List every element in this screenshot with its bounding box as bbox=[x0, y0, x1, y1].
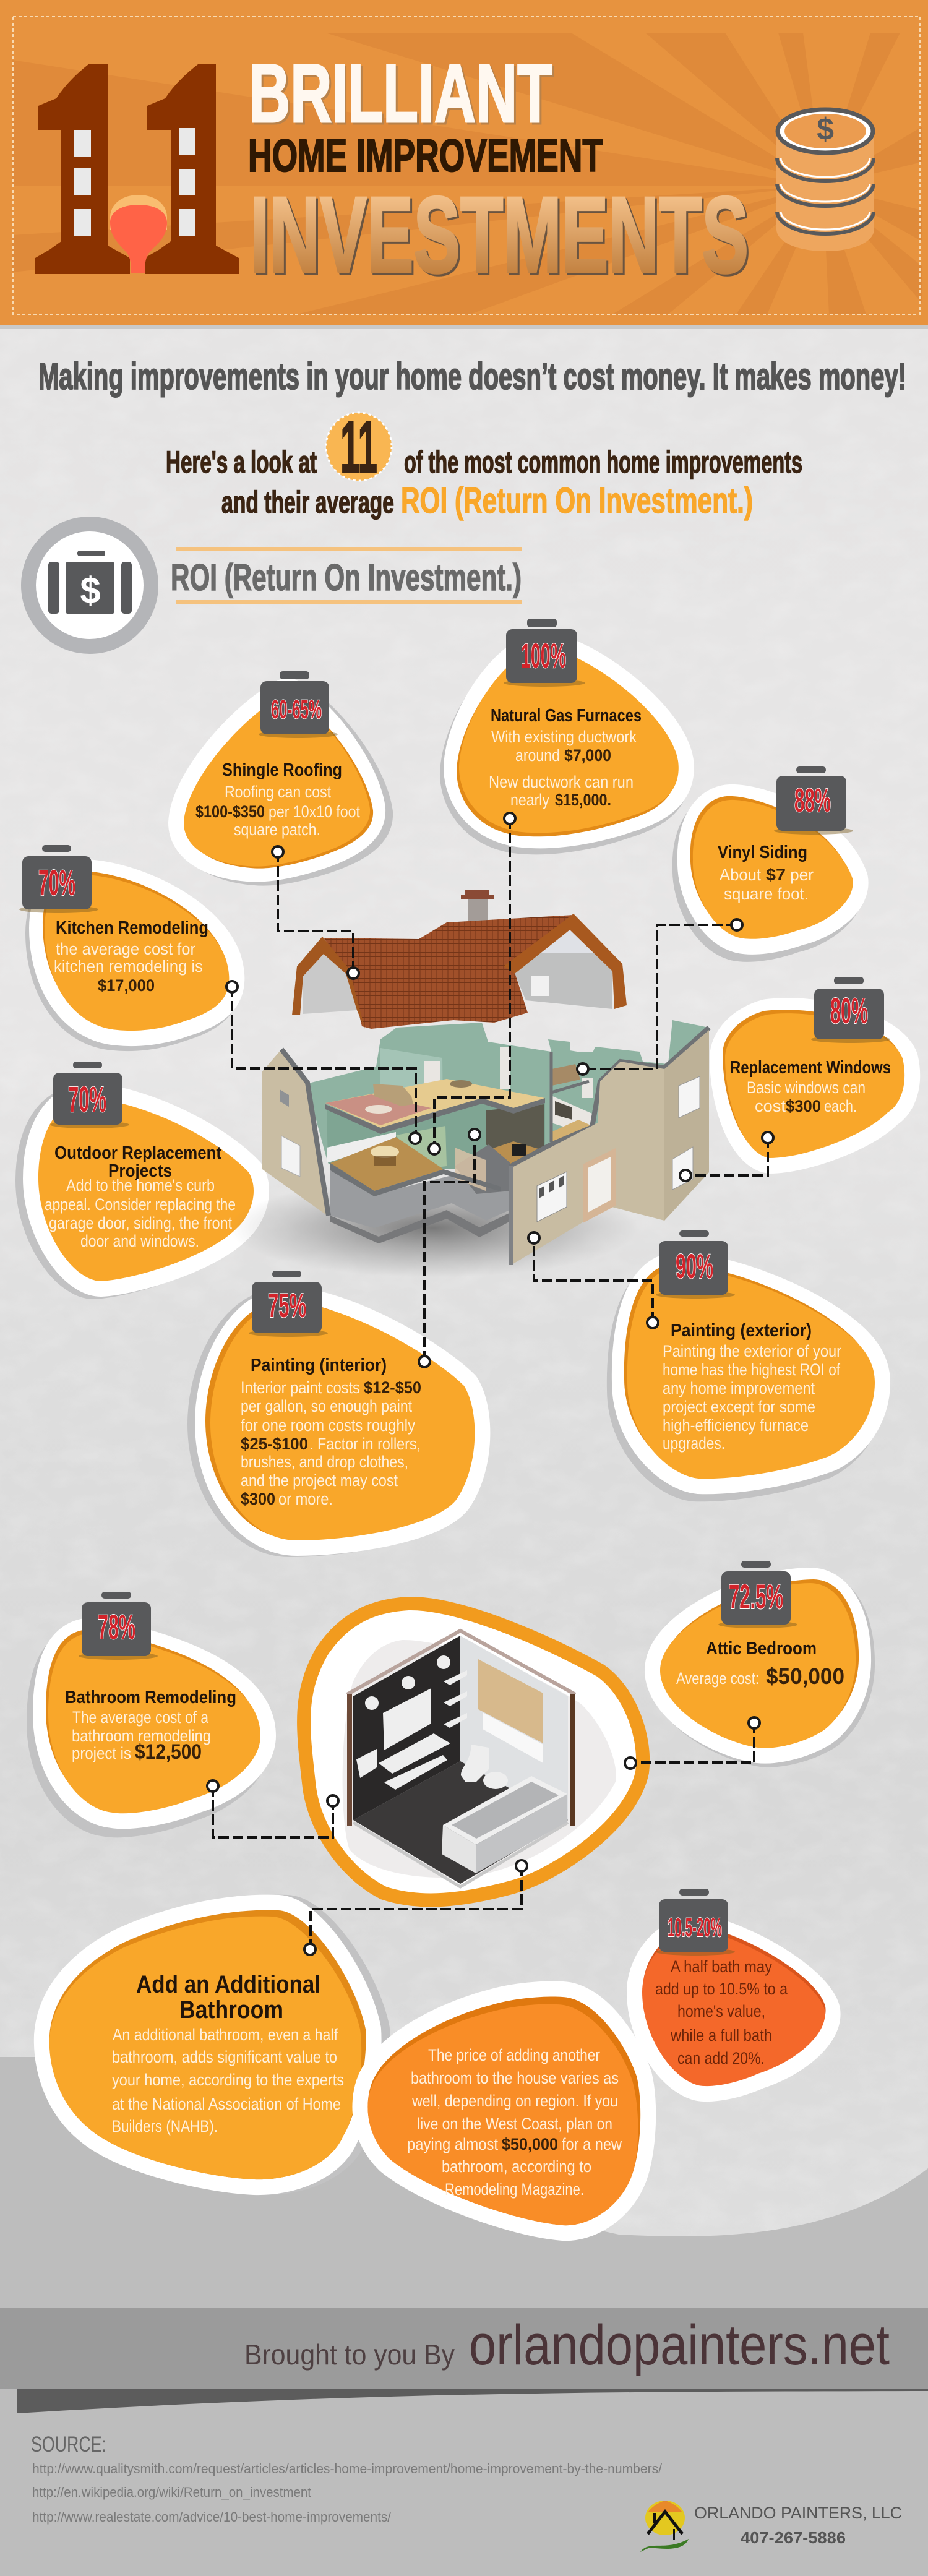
mirror, sink and fixtures bbox=[356, 1655, 508, 1790]
body text: and the project may cost bbox=[241, 1471, 398, 1490]
body text bbox=[407, 2046, 622, 2199]
connector: vinyl siding bbox=[577, 919, 742, 1075]
body text bbox=[676, 1664, 844, 1689]
body text: $12,500 bbox=[135, 1740, 202, 1764]
body text: About bbox=[720, 865, 761, 884]
ROI legend bbox=[28, 524, 522, 646]
bubble: half bath value bbox=[642, 1889, 826, 2086]
heading: Bathroom Remodeling bbox=[65, 1688, 236, 1707]
bubble: vinyl siding bbox=[688, 766, 853, 947]
body text: $17,000 bbox=[98, 976, 155, 995]
heading: Projects bbox=[108, 1161, 172, 1181]
title bbox=[248, 48, 749, 296]
badge: number 11 bbox=[326, 406, 392, 488]
percent tag: 70% bbox=[19, 845, 98, 913]
bubble: painting exterior bbox=[622, 1230, 875, 1486]
body text: your home, according to the experts bbox=[112, 2071, 344, 2089]
body text: Add to the home's curb bbox=[66, 1176, 215, 1195]
body text: project except for some bbox=[663, 1397, 815, 1416]
basement bbox=[330, 1170, 511, 1228]
body text: $12-$50 bbox=[364, 1378, 421, 1397]
connector: painting exterior bbox=[528, 1232, 658, 1328]
body text: paying almost bbox=[407, 2135, 498, 2153]
heading bbox=[54, 1143, 221, 1181]
body text: Painting the exterior of your bbox=[663, 1342, 841, 1360]
body text: door and windows. bbox=[80, 1232, 199, 1250]
intro line two: and their average bbox=[221, 485, 394, 520]
body text bbox=[45, 1176, 236, 1250]
body text bbox=[720, 865, 814, 903]
bubble: cost of adding a bathroom bbox=[367, 1997, 640, 2225]
percent tag: 70%: 70% bbox=[38, 863, 75, 903]
source links bbox=[32, 2461, 663, 2525]
source links: http://www.realestate.com/advice/10-best-home-improvements/ bbox=[32, 2509, 392, 2525]
body text bbox=[489, 728, 637, 809]
heading: Vinyl Siding bbox=[718, 843, 807, 862]
bubble: bathroom remodeling bbox=[42, 1592, 260, 1822]
percent tag: 70%: 70% bbox=[68, 1080, 106, 1120]
body text: home's value, bbox=[677, 2002, 765, 2020]
body text: or more. bbox=[278, 1490, 333, 1508]
bubble: attic bedroom bbox=[660, 1561, 859, 1752]
body text bbox=[72, 1708, 211, 1764]
percent tag: 80%: 80% bbox=[830, 991, 868, 1031]
body text: With existing ductwork bbox=[491, 728, 637, 746]
body text: An additional bathroom, even a half bbox=[113, 2025, 338, 2044]
percent tag: 70% bbox=[50, 1062, 129, 1128]
legend heading: ROI (Return On Investment.) bbox=[171, 557, 522, 598]
window blind bbox=[478, 1659, 543, 1743]
connector: bathroom remodeling bbox=[207, 1780, 338, 1837]
body text: live on the West Coast, plan on bbox=[417, 2114, 612, 2133]
sources bbox=[31, 2432, 663, 2525]
body text: The price of adding another bbox=[428, 2046, 600, 2064]
body text: $300 bbox=[241, 1490, 275, 1508]
grey floor edges bbox=[330, 1163, 501, 1196]
percent tag: 78%: 78% bbox=[98, 1607, 135, 1646]
percent tag: 100% bbox=[504, 619, 585, 687]
percent tag: 78% bbox=[79, 1592, 158, 1660]
body text: A half bath may bbox=[671, 1957, 772, 1976]
body text: for a new bbox=[562, 2135, 622, 2153]
heading: Add an Additional bbox=[136, 1971, 320, 1998]
illustration: bathroom in orange ring bbox=[304, 1604, 643, 1900]
body text: $100-$350 bbox=[195, 802, 265, 821]
source heading: SOURCE: bbox=[31, 2432, 106, 2457]
illustration: cutaway house bbox=[229, 1020, 709, 1277]
body text: appeal. Consider replacing the bbox=[45, 1195, 236, 1214]
body text: $7 bbox=[766, 865, 786, 884]
icon: briefcase with dollar: $ bbox=[80, 570, 101, 611]
heading: Bathroom bbox=[179, 1996, 283, 2024]
heading: Shingle Roofing bbox=[222, 760, 342, 780]
body text: Roofing can cost bbox=[225, 783, 331, 801]
body text: can add 20%. bbox=[677, 2049, 765, 2067]
body text: $50,000 bbox=[502, 2135, 558, 2153]
percent tag: 75% bbox=[249, 1271, 328, 1337]
intro line one start: Here's a look at bbox=[166, 445, 317, 479]
connector: painting interior bbox=[419, 1129, 480, 1367]
brought to you by: Brought to you By bbox=[244, 2338, 455, 2371]
heading: Outdoor Replacement bbox=[54, 1143, 221, 1163]
connector lines: painting bbox=[419, 1129, 658, 1367]
chimney bbox=[461, 890, 494, 921]
body text: Average cost: bbox=[676, 1669, 759, 1688]
legend heading bbox=[171, 547, 522, 604]
body text: cost bbox=[755, 1097, 786, 1115]
body text: around bbox=[515, 746, 560, 765]
body text: bathroom, according to bbox=[442, 2157, 591, 2176]
body text: Interior paint costs bbox=[241, 1378, 360, 1397]
connector: replacement windows bbox=[680, 1132, 773, 1181]
heading: Painting (interior) bbox=[251, 1355, 387, 1375]
body text bbox=[112, 2025, 344, 2136]
body text: well, depending on region. If you bbox=[411, 2092, 618, 2110]
heading: Replacement Windows bbox=[730, 1058, 891, 1078]
body text: New ductwork can run bbox=[489, 773, 634, 791]
right rooms bbox=[551, 1052, 597, 1142]
percent tag: 72.5% bbox=[718, 1561, 797, 1628]
percent tag: 60-65% bbox=[259, 671, 338, 738]
title line: home improvement: HOME IMPROVEMENT bbox=[248, 130, 603, 181]
connector: kitchen remodeling bbox=[226, 981, 421, 1144]
bubble: natural gas furnaces bbox=[455, 619, 679, 839]
body text: any home improvement bbox=[663, 1379, 815, 1397]
icon: coin stack bbox=[776, 109, 874, 251]
connector: gas furnaces bbox=[429, 813, 515, 1154]
heading: Attic Bedroom bbox=[706, 1639, 817, 1659]
body text: nearly bbox=[510, 791, 549, 809]
bathtub bbox=[443, 1776, 567, 1845]
heading: Painting (exterior) bbox=[671, 1321, 812, 1341]
body text: each. bbox=[824, 1097, 857, 1115]
icon: briefcase with dollar bbox=[28, 524, 151, 646]
body text: high-efficiency furnace bbox=[663, 1416, 809, 1435]
heading: Natural Gas Furnaces bbox=[491, 706, 642, 726]
body text: . Factor in rollers, bbox=[309, 1435, 421, 1453]
bubble: shingle roofing bbox=[184, 671, 377, 870]
body text: home has the highest ROI of bbox=[663, 1360, 840, 1379]
body text: garage door, siding, the front bbox=[49, 1214, 232, 1232]
body text: Builders (NAHB). bbox=[112, 2117, 218, 2136]
bubble: painting interior bbox=[203, 1271, 475, 1542]
percent tag: 60-65%: 60-65% bbox=[271, 695, 322, 724]
badge: number 11: 11 bbox=[340, 406, 377, 488]
body text: while a full bath bbox=[670, 2026, 772, 2045]
body text: per 10x10 foot bbox=[269, 802, 360, 821]
body text: Basic windows can bbox=[747, 1078, 866, 1097]
left beige wall bbox=[262, 1049, 327, 1216]
body text: $25-$100 bbox=[241, 1435, 308, 1453]
body text: $15,000. bbox=[555, 791, 611, 809]
walls and floor bbox=[353, 1636, 460, 1820]
body text: $50,000 bbox=[766, 1664, 844, 1689]
percent tag: 80% bbox=[811, 977, 890, 1043]
body text: per gallon, so enough paint bbox=[241, 1397, 412, 1415]
percent tag: 88% bbox=[774, 766, 853, 835]
percent tag: 75%: 75% bbox=[268, 1286, 306, 1324]
illustration: detached roof bbox=[292, 890, 627, 1029]
percent tag: 10.5-20% bbox=[656, 1889, 735, 1956]
title line: brilliant: BRILLIANT bbox=[249, 48, 552, 140]
body text bbox=[747, 1078, 866, 1115]
icon: house and sun bbox=[640, 2501, 689, 2552]
connector: attic bedroom bbox=[625, 1717, 760, 1769]
percent tag: 90%: 90% bbox=[676, 1247, 713, 1286]
body text: upgrades. bbox=[663, 1434, 725, 1453]
body text: at the National Association of Home bbox=[112, 2095, 341, 2113]
body text: Remodeling Magazine. bbox=[445, 2180, 584, 2199]
body text bbox=[54, 940, 203, 995]
heading bbox=[136, 1971, 320, 2024]
body text: add up to 10.5% to a bbox=[655, 1980, 788, 1998]
big number 11 bbox=[35, 64, 239, 274]
connector: shingle roofing bbox=[272, 846, 359, 979]
percent tag: 88%: 88% bbox=[794, 782, 831, 819]
percent tag: 90% bbox=[656, 1230, 735, 1299]
percent tag: 10.5-20%: 10.5-20% bbox=[668, 1913, 722, 1943]
back green walls bbox=[306, 1020, 709, 1163]
upper floor bbox=[325, 1079, 545, 1128]
body text: The average cost of a bbox=[72, 1708, 209, 1727]
body text: square patch. bbox=[234, 820, 320, 839]
footer banner bbox=[0, 2308, 928, 2413]
body text: brushes, and drop clothes, bbox=[241, 1453, 408, 1471]
front beige wall bbox=[511, 1062, 664, 1265]
connector: additional bathroom bbox=[304, 1860, 527, 1955]
connector lines: house bbox=[226, 813, 773, 1181]
company name: ORLANDO PAINTERS, LLC bbox=[694, 2504, 902, 2522]
body text bbox=[241, 1378, 421, 1508]
company logo bbox=[640, 2501, 902, 2552]
lower level rooms bbox=[327, 1103, 545, 1191]
body text: kitchen remodeling is bbox=[54, 957, 203, 976]
lower grey area bbox=[0, 2057, 928, 2576]
body text bbox=[655, 1957, 788, 2067]
body text bbox=[663, 1342, 841, 1453]
bubble: outdoor replacement projects bbox=[31, 1062, 254, 1284]
bubble: replacement windows bbox=[723, 977, 904, 1158]
body text: $7,000 bbox=[564, 746, 611, 765]
body text: per bbox=[790, 865, 814, 884]
stairs bbox=[455, 1144, 511, 1194]
body text: project is bbox=[72, 1744, 131, 1762]
source links: http://www.qualitysmith.com/request/articles/articles-home-improvement/home-improvement-by-the-numbers/ bbox=[32, 2461, 663, 2476]
body text: bathroom to the house varies as bbox=[411, 2069, 619, 2087]
body text bbox=[195, 783, 360, 839]
bubble: kitchen remodeling bbox=[19, 845, 229, 1036]
connector lines: bathrooms bbox=[207, 1717, 760, 1955]
body text: $300 bbox=[786, 1097, 821, 1115]
body text: for one room costs roughly bbox=[241, 1416, 415, 1435]
icon: coin stack: $ bbox=[817, 112, 834, 147]
percent tag: 100%: 100% bbox=[521, 636, 566, 675]
heading: Kitchen Remodeling bbox=[56, 918, 208, 938]
body text: bathroom remodeling bbox=[72, 1727, 211, 1745]
intro line two highlight: ROI (Return On Investment.) bbox=[401, 481, 753, 521]
header banner bbox=[0, 0, 928, 329]
body text: square foot. bbox=[724, 885, 809, 903]
intro text bbox=[166, 406, 802, 521]
percent tag: 72.5%: 72.5% bbox=[729, 1577, 783, 1616]
body text: the average cost for bbox=[56, 940, 195, 958]
body text: bathroom, adds significant value to bbox=[112, 2048, 337, 2066]
phone number: 407-267-5886 bbox=[741, 2528, 846, 2547]
source links: http://en.wikipedia.org/wiki/Return_on_investment bbox=[32, 2484, 311, 2500]
bubble: add an additional bathroom bbox=[49, 1910, 375, 2179]
